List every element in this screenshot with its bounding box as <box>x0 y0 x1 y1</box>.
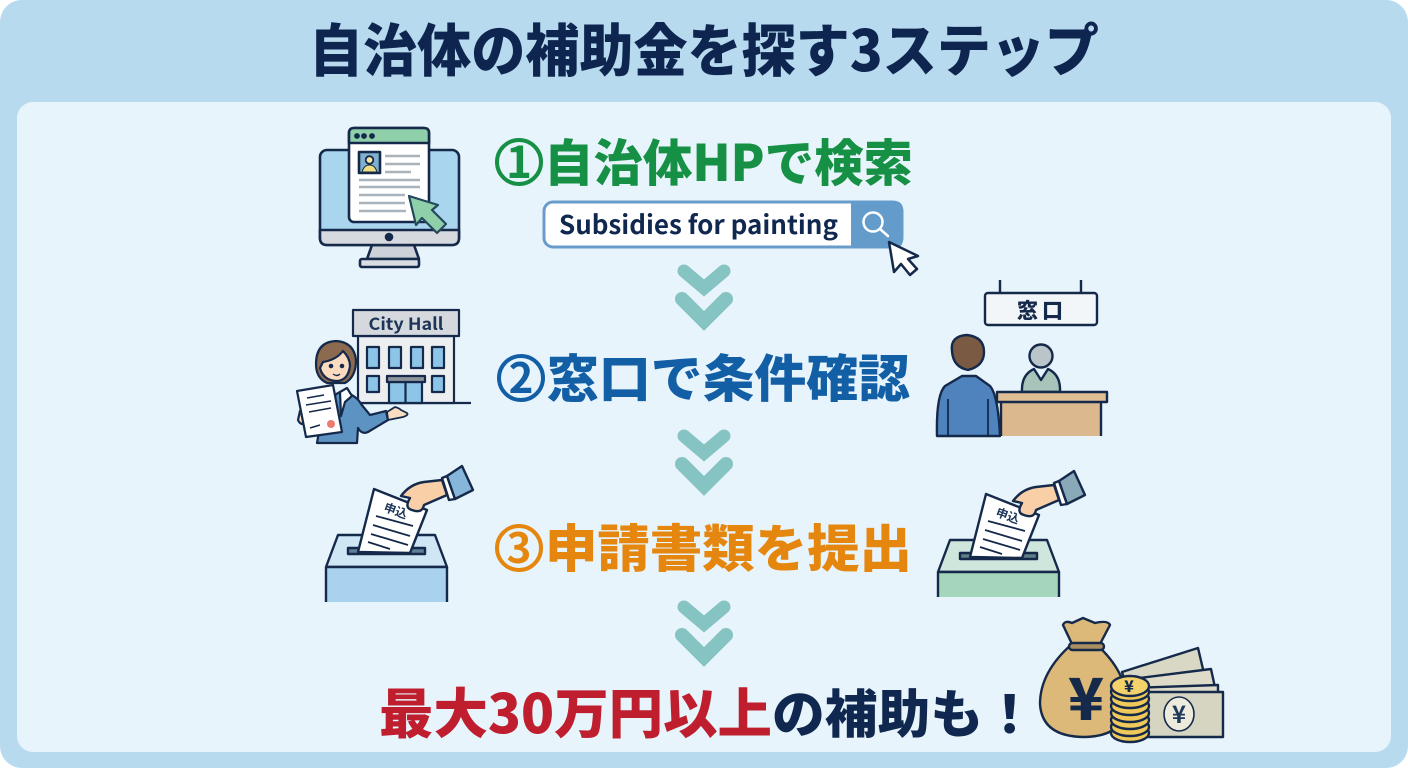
icon: ballot box right: 申込 <box>994 503 1022 528</box>
closing message: 最大30万円以上 <box>379 670 772 749</box>
icon: service counter: 窓口 <box>1017 295 1063 325</box>
arrow: double chevron 3 <box>682 607 726 657</box>
closing message <box>379 670 1036 749</box>
step 1 heading: 1 <box>506 127 532 191</box>
arrow: double chevron 2 <box>682 436 726 486</box>
icon: ballot box left <box>326 466 473 602</box>
icon: magnifier <box>864 212 888 236</box>
step 3 heading: 申請書類を提出 <box>545 508 912 582</box>
search box: Subsidies for painting <box>559 205 838 242</box>
icon: ballot box right <box>938 471 1085 597</box>
step 2 heading: 窓口で条件確認 <box>547 338 910 412</box>
icon: ballot box left: 申込 <box>382 498 410 523</box>
step 2 heading: 2 <box>509 345 533 406</box>
icon: woman at city hall <box>297 310 471 443</box>
search box <box>544 201 918 275</box>
icon: service counter <box>937 280 1107 436</box>
icon: woman at city hall: City Hall <box>368 310 444 335</box>
title: 自治体の補助金を探す3ステップ <box>309 6 1099 88</box>
icon: money bag, coins and bills: ¥ <box>1124 673 1134 697</box>
closing message: の補助も！ <box>772 673 1036 748</box>
icon: money bag, coins and bills: ¥ <box>1172 695 1186 730</box>
icon: computer with web page <box>320 128 459 267</box>
step 1 heading: 自治体HPで検索 <box>544 124 913 196</box>
icon: money bag, coins and bills: ¥ <box>1068 653 1104 737</box>
step 3 heading: 3 <box>507 515 531 576</box>
icon: cursor <box>889 242 918 275</box>
arrow: double chevron 1 <box>682 271 726 321</box>
icon: money bag, coins and bills <box>1040 618 1223 742</box>
